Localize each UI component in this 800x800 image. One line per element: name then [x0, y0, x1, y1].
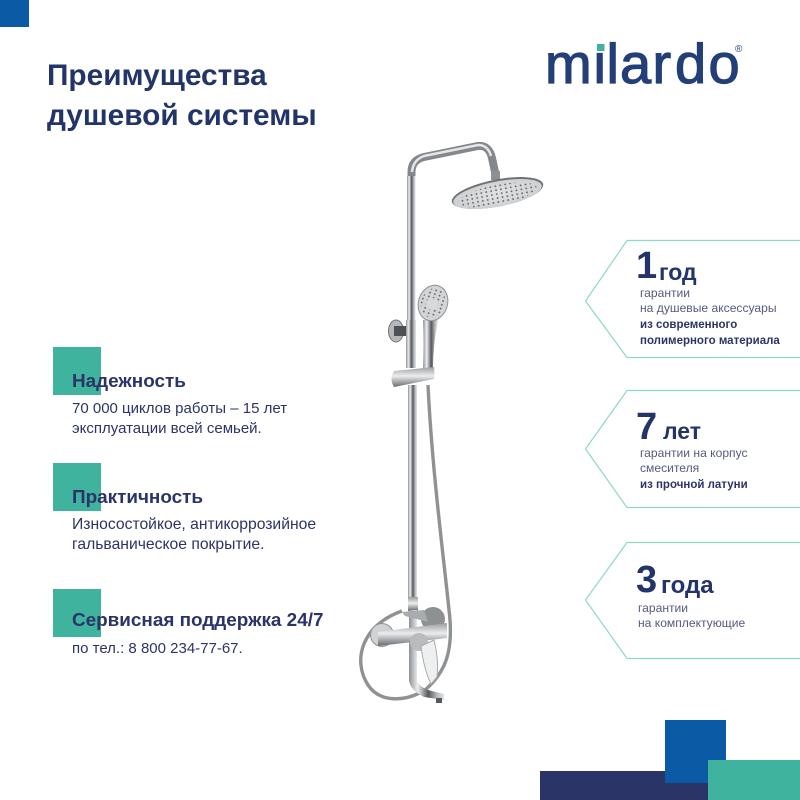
navy block [540, 771, 710, 800]
text: по тел.: 8 800 234-77-67. [72, 640, 243, 657]
number: 7 [636, 406, 657, 448]
description: из современного [640, 319, 737, 331]
description: гарантии [638, 601, 688, 615]
description: на душевые аксессуары [640, 301, 777, 315]
hose [361, 385, 450, 699]
panel: benefit practicality [53, 463, 316, 553]
card: 1 year warranty [636, 245, 780, 347]
hand shower [414, 281, 452, 368]
accent square [53, 347, 101, 395]
title: Преимущества [47, 59, 267, 92]
panel: benefit reliability [53, 347, 287, 437]
product: shower system [359, 142, 544, 703]
heading: Надежность [72, 371, 186, 392]
shower head [449, 171, 546, 215]
heading: Практичность [72, 487, 203, 508]
description: на комплектующие [638, 616, 745, 630]
text: гальваническое покрытие. [72, 536, 264, 553]
description: из прочной латуни [640, 479, 748, 491]
description [638, 601, 745, 630]
unit: года [661, 572, 714, 599]
pole [406, 145, 495, 601]
text [72, 400, 287, 437]
slider [392, 367, 434, 387]
description: полимерного материала [640, 335, 780, 347]
panel: benefit support [53, 589, 323, 657]
card: 3 years warranty [636, 559, 745, 630]
wall bracket [388, 320, 406, 342]
text: Износостойкое, антикоррозийное [72, 516, 316, 533]
description: смесителя [640, 461, 699, 475]
text: эксплуатации всей семьей. [72, 420, 262, 437]
heading: Сервисная поддержка 24/7 [72, 610, 323, 631]
card: 7 years warranty [636, 406, 748, 491]
description: гарантии [640, 286, 690, 300]
description [640, 286, 780, 347]
number: 3 [636, 559, 657, 601]
description: гарантии на корпус [640, 446, 748, 460]
text [72, 516, 316, 553]
corner square [0, 0, 29, 27]
accent square [53, 589, 101, 637]
logo: ® [735, 44, 743, 55]
title: душевой системы [47, 99, 317, 132]
unit: год [659, 259, 697, 285]
title [47, 59, 317, 132]
text: 70 000 циклов работы – 15 лет [72, 400, 287, 417]
description [640, 446, 748, 491]
mixer and spout [370, 597, 447, 703]
unit: лет [663, 418, 701, 444]
number: 1 [636, 245, 657, 287]
blue block [665, 720, 726, 783]
accent square [53, 463, 101, 511]
decorative blocks [540, 720, 800, 800]
card frames [584, 240, 800, 660]
green block [708, 760, 800, 800]
